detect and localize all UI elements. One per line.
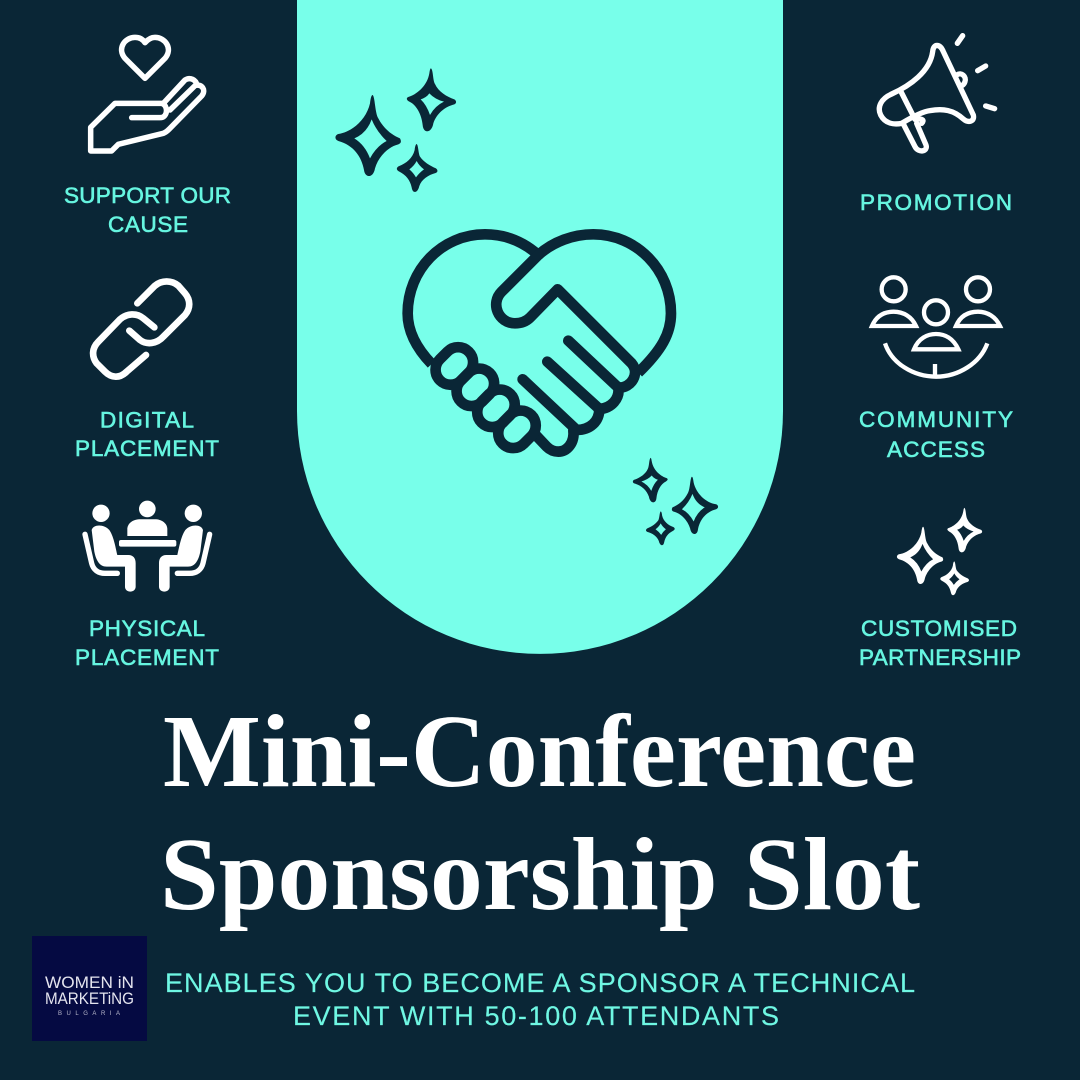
subtitle text: EVENT WITH 50-100 ATTENDANTS [293, 1001, 779, 1031]
label: support our cause [64, 183, 231, 237]
label: customised partnership: PARTNERSHIP [859, 645, 1021, 670]
icon: people meeting at a table [85, 501, 210, 592]
icon: hand holding heart [91, 37, 204, 151]
label: physical placement [75, 616, 219, 670]
panel: central teal arch [297, 0, 783, 654]
label: customised partnership: CUSTOMISED [861, 616, 1017, 641]
label: community access [859, 407, 1013, 462]
label: physical placement: PLACEMENT [75, 645, 219, 670]
label: digital placement: DIGITAL [100, 408, 194, 432]
title: Sponsorship Slot [160, 817, 920, 932]
label: digital placement: PLACEMENT [75, 436, 219, 461]
icon: white sparkles [897, 508, 982, 595]
label: customised partnership [859, 616, 1021, 670]
label: community access: COMMUNITY [859, 407, 1013, 432]
label: community access: ACCESS [887, 437, 985, 462]
logo: Women in Marketing Bulgaria: MARKETiNG [45, 989, 134, 1008]
icon: megaphone [879, 36, 995, 151]
logo: Women in Marketing Bulgaria: BULGARIA [58, 1011, 120, 1017]
label: support our cause: CAUSE [108, 212, 188, 237]
label: support our cause: SUPPORT OUR [64, 183, 231, 208]
icon: chain link [93, 281, 189, 377]
label: physical placement: PHYSICAL [89, 616, 205, 641]
logo: Women in Marketing Bulgaria: WOMEN iN [45, 973, 134, 992]
icon: handshake heart [408, 234, 671, 454]
subtitle text: ENABLES YOU TO BECOME A SPONSOR A TECHNICAL [165, 968, 915, 998]
label: promotion: PROMOTION [860, 190, 1012, 215]
label: digital placement [75, 408, 219, 461]
icon: sparkles top left of arch [335, 68, 456, 192]
title [160, 694, 920, 932]
subtitle text [165, 968, 915, 1031]
title: Mini-Conference [163, 694, 916, 809]
icon: sparkles bottom right of arch [633, 458, 718, 545]
logo: Women in Marketing Bulgaria [32, 936, 147, 1041]
icon: community group [872, 277, 1000, 377]
